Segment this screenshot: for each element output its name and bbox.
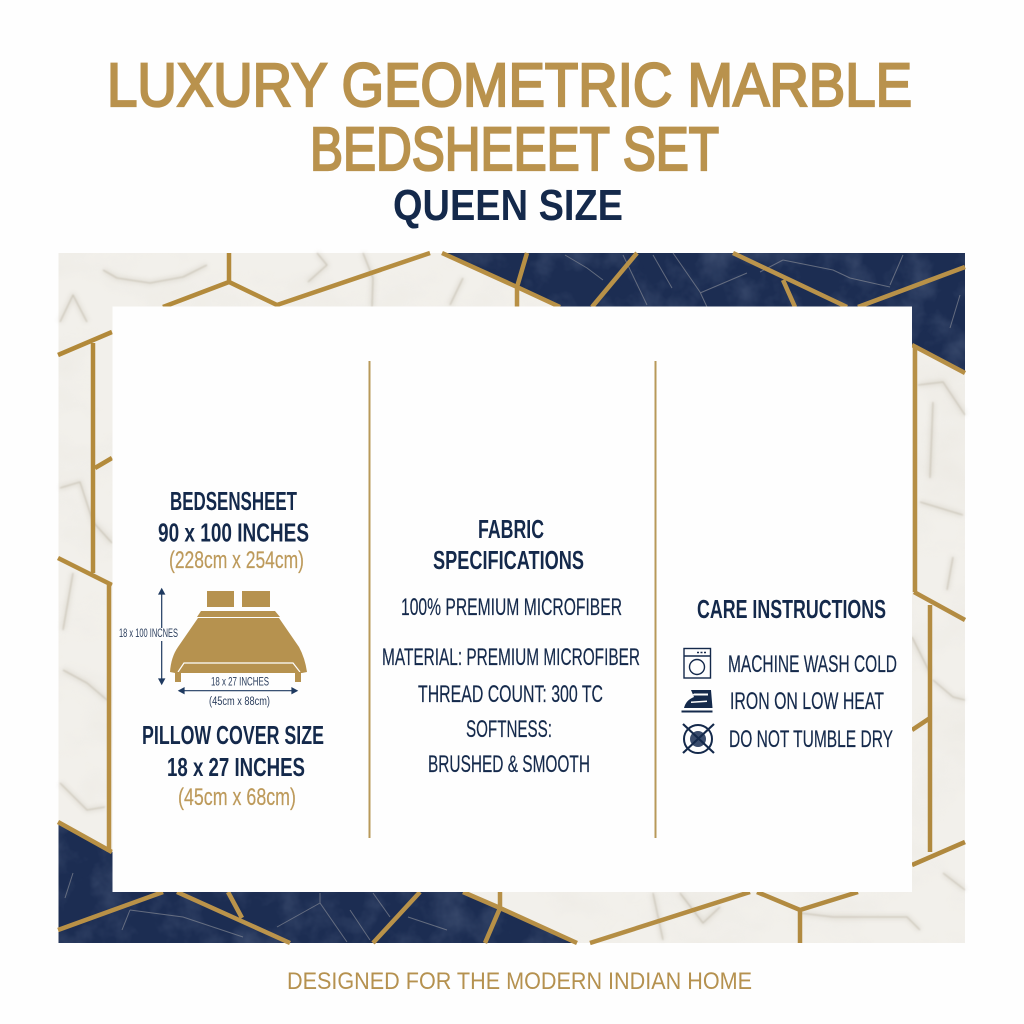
bedsheet heading: 90 x 100 INCHES [158, 518, 309, 548]
bedsheet heading: BEDSENSHEET [170, 486, 297, 516]
panel: fabric specifications [382, 514, 640, 778]
pillow cover heading [142, 720, 324, 811]
subtitle: QUEEN SIZE [393, 182, 623, 230]
arrow: horizontal dimension [179, 688, 297, 693]
label: horizontal dimension: (45cm x 88cm) [209, 696, 270, 708]
icon: bed diagram [170, 591, 307, 682]
fabric heading [433, 514, 584, 575]
pillow cover heading: PILLOW COVER SIZE [142, 720, 324, 750]
fabric details: MATERIAL: PREMIUM MICROFIBER [382, 644, 640, 671]
pillow cover heading: (45cm x 68cm) [178, 784, 296, 811]
fabric details: THREAD COUNT: 300 TC [418, 681, 603, 708]
panel: white card [112, 306, 912, 892]
pillow cover heading: 18 x 27 INCHES [167, 752, 305, 782]
care heading: CARE INSTRUCTIONS [697, 594, 886, 624]
bedsheet heading: (228cm x 254cm) [169, 547, 304, 574]
fabric details [382, 594, 640, 778]
label: horizontal dimension: 18 x 27 INCHES [211, 676, 269, 688]
bedsheet heading [158, 486, 309, 574]
icon: do not tumble dry [683, 724, 714, 753]
title [107, 51, 912, 183]
label: horizontal dimension [209, 676, 270, 708]
fabric details: SOFTNESS: [466, 716, 552, 743]
panel: care instructions [682, 594, 897, 753]
label: vertical dimension: 18 x 100 INCNES [119, 628, 178, 640]
icon: iron [682, 690, 712, 712]
panel: bedsheet sizes [119, 486, 324, 811]
fabric heading: SPECIFICATIONS [433, 545, 584, 575]
icon: washing machine [684, 648, 710, 678]
care text: wash: MACHINE WASH COLD [728, 651, 897, 678]
fabric details: 100% PREMIUM MICROFIBER [401, 594, 622, 621]
footer tagline: DESIGNED FOR THE MODERN INDIAN HOME [287, 968, 752, 995]
title: BEDSHEEET SET [310, 115, 719, 183]
panel: marble and navy frame [58, 253, 965, 943]
care text: iron: IRON ON LOW HEAT [730, 688, 884, 715]
arrow: vertical dimension [159, 589, 164, 684]
title: LUXURY GEOMETRIC MARBLE [107, 51, 912, 119]
column divider right [654, 361, 656, 838]
care text: tumble dry: DO NOT TUMBLE DRY [729, 726, 893, 753]
column divider left [368, 361, 370, 838]
fabric details: BRUSHED & SMOOTH [428, 751, 590, 778]
fabric heading: FABRIC [478, 514, 544, 544]
